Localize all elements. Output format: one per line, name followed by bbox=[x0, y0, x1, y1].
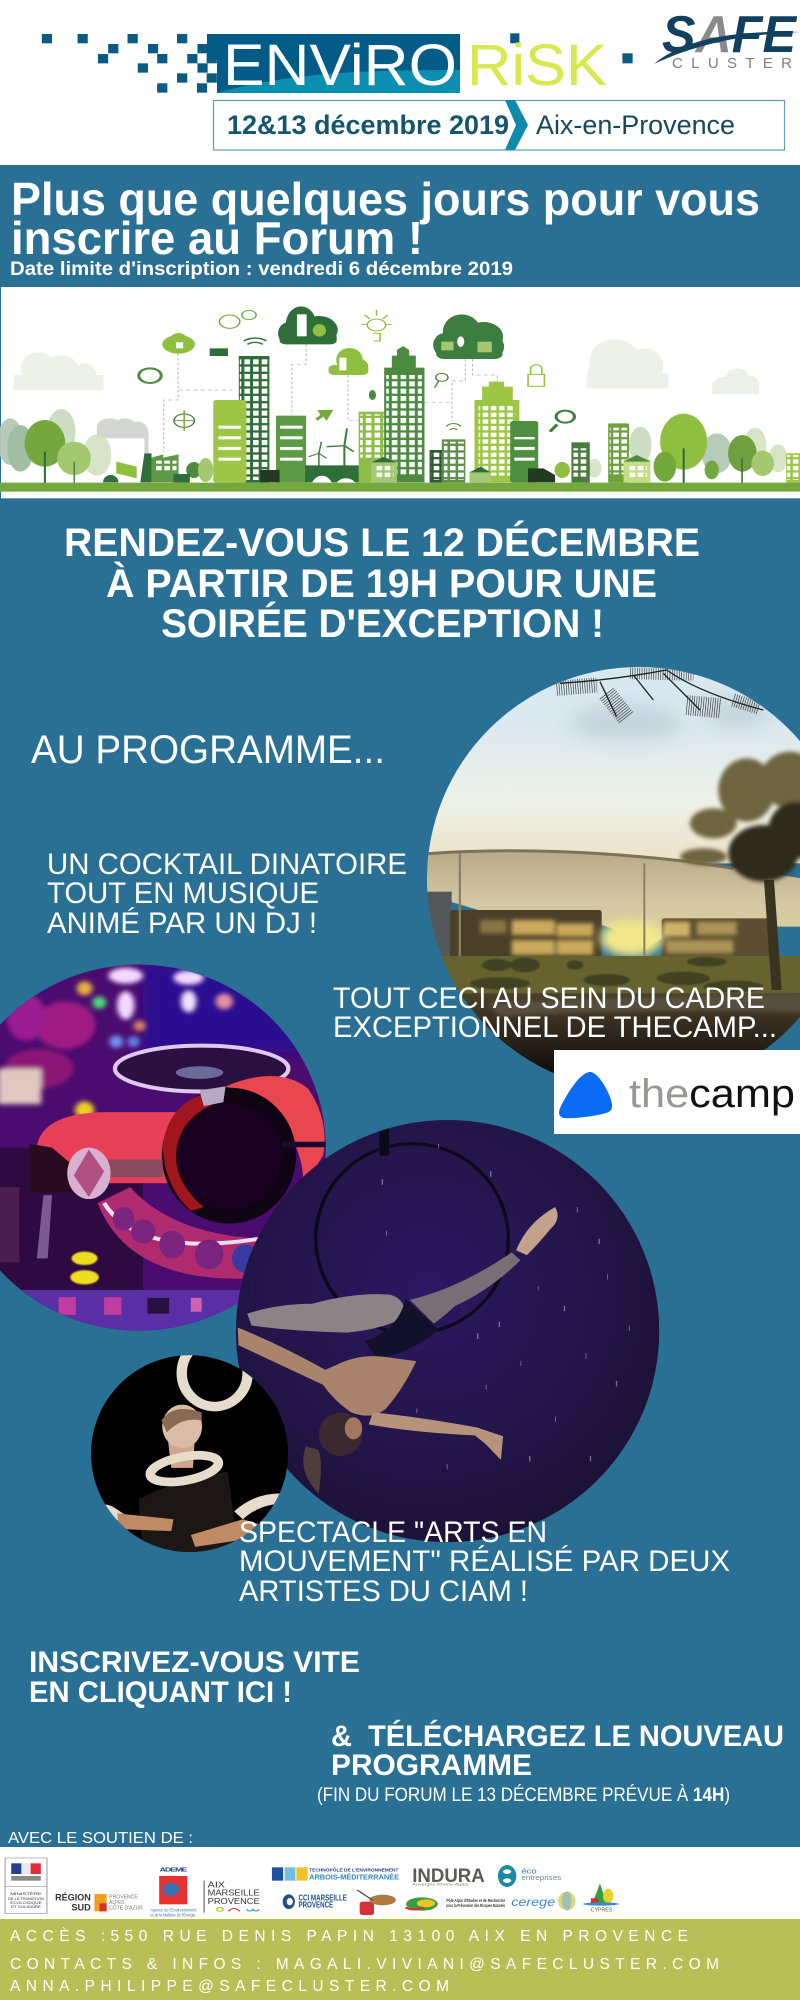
logo: ministère: ÉCOLOGIQUE bbox=[10, 1900, 42, 1906]
date banner: Aix-en-Provence bbox=[536, 110, 735, 140]
photo: juggler bbox=[91, 1355, 288, 1552]
text: cadre exceptionnel: EXCEPTIONNEL DE THECAMP... bbox=[333, 1011, 777, 1044]
buildings centre bbox=[359, 346, 424, 483]
footer contact panel bbox=[0, 1919, 800, 2000]
logo: région sud: RÉGION bbox=[55, 1891, 91, 1903]
factory smoke bbox=[97, 418, 148, 455]
sponsor logos panel bbox=[0, 1847, 800, 1919]
buildings left bbox=[213, 356, 306, 483]
thecamp logo bbox=[554, 1050, 800, 1134]
text: cocktail: UN COCKTAIL DINATOIRE bbox=[47, 848, 407, 881]
logo: aix marseille provence: AIX bbox=[208, 1880, 226, 1890]
text: cocktail: TOUT EN MUSIQUE bbox=[47, 877, 319, 910]
logo: aix marseille provence bbox=[204, 1880, 260, 1913]
logo: région sud: PROVENCE bbox=[109, 1893, 138, 1900]
text: cadre exceptionnel bbox=[333, 982, 777, 1044]
smart city illustration bbox=[0, 287, 800, 498]
date banner bbox=[214, 100, 784, 150]
EnviroRisk logo bbox=[42, 33, 633, 98]
text: cocktail: ANIMÉ PAR UN DJ ! bbox=[47, 907, 317, 940]
SAFE Cluster logo: CLUSTER bbox=[672, 55, 792, 72]
line icons bbox=[139, 310, 574, 432]
title block: inscrire au Forum ! bbox=[11, 212, 423, 264]
ENViRO wordmark: ENViRO bbox=[223, 33, 457, 98]
logo: arbois bbox=[272, 1867, 399, 1882]
title block bbox=[10, 173, 760, 280]
logo: indura: INDURA bbox=[412, 1865, 485, 1887]
logo: cci marseille provence: PROVENCE bbox=[298, 1901, 333, 1910]
cloud icons bbox=[162, 306, 504, 375]
logo: éco entreprises: entreprises bbox=[521, 1874, 561, 1882]
photo: DJ headphones bbox=[0, 964, 326, 1331]
logo: éco entreprises: éco bbox=[521, 1867, 537, 1876]
logo: arbois: TECHNOPÔLE DE L'ENVIRONNEMENT bbox=[309, 1867, 399, 1873]
logo blue box bbox=[207, 34, 460, 93]
logo: aix marseille provence: MARSEILLE bbox=[208, 1888, 260, 1898]
pixel squares bbox=[42, 33, 633, 93]
logo: ademe: Agence de l'Environnement bbox=[151, 1909, 197, 1913]
main heading: SOIRÉE D'EXCEPTION ! bbox=[161, 601, 604, 646]
logo: ademe: et de la Maîtrise de l'Énergie bbox=[151, 1913, 195, 1918]
call to action: inscription: EN CLIQUANT ICI ! bbox=[29, 1676, 292, 1709]
wind turbines bbox=[309, 428, 354, 467]
factory and solar panel bbox=[103, 453, 190, 483]
header panel bbox=[0, 0, 800, 165]
logo: région sud: CÔTE D'AZUR bbox=[109, 1904, 143, 1911]
thecamp wordmark: thecamp bbox=[629, 1072, 795, 1116]
logo: pôle alpin: Pôle Alpin d'Études et de Recherche bbox=[446, 1897, 505, 1904]
logo: indura bbox=[412, 1865, 485, 1887]
text: spectacle: MOUVEMENT" RÉALISÉ PAR DEUX bbox=[239, 1545, 730, 1578]
text: spectacle: SPECTACLE "ARTS EN bbox=[239, 1516, 547, 1549]
logo: ademe bbox=[151, 1866, 197, 1918]
title block: Plus que quelques jours pour vous bbox=[11, 173, 760, 225]
call to action: programme: PROGRAMME bbox=[331, 1749, 532, 1782]
logo: région sud: SUD bbox=[71, 1902, 91, 1913]
pale background trees bbox=[0, 409, 787, 478]
text: cadre exceptionnel: TOUT CECI AU SEIN DU CADRE bbox=[333, 982, 765, 1015]
title block: Date limite d'inscription : vendredi 6 décembre 2019 bbox=[10, 259, 513, 280]
bridge bbox=[305, 465, 372, 482]
logo: cerege bbox=[511, 1892, 576, 1910]
call to action: inscription: INSCRIVEZ-VOUS VITE bbox=[29, 1646, 360, 1679]
logo: red emblem bbox=[357, 1890, 396, 1915]
sponsors heading: AVEC LE SOUTIEN DE : bbox=[8, 1830, 193, 1847]
footer contact panel: CONTACTS & INFOS : MAGALI.VIVIANI@SAFECLUSTER.COM bbox=[10, 1956, 719, 1973]
text: spectacle: ARTISTES DU CIAM ! bbox=[239, 1575, 528, 1608]
logo teal arc bbox=[217, 70, 460, 93]
dashed network lines bbox=[164, 344, 497, 452]
logo: ministère: MINISTÈRE bbox=[10, 1891, 42, 1897]
logo: cci marseille provence: CCI MARSEILLE bbox=[298, 1894, 347, 1903]
call to action: programme bbox=[331, 1719, 784, 1782]
main heading: RENDEZ-VOUS LE 12 DÉCEMBRE bbox=[64, 520, 700, 565]
logo: ademe: ADEME bbox=[160, 1866, 187, 1873]
green trees bbox=[24, 414, 774, 483]
buildings right bbox=[430, 382, 800, 483]
background clouds bbox=[14, 339, 759, 394]
logo: cci marseille provence bbox=[283, 1894, 347, 1910]
call to action: programme: & TÉLÉCHARGEZ LE NOUVEAU bbox=[331, 1719, 784, 1753]
logo: cerege: cerege bbox=[511, 1896, 555, 1909]
footer contact panel: ANNA.PHILIPPE@SAFECLUSTER.COM bbox=[10, 1978, 449, 1995]
logo: pôle alpin bbox=[446, 1897, 505, 1909]
logo: ministère bbox=[5, 1858, 47, 1913]
logo: cyprès bbox=[583, 1883, 619, 1913]
SAFE Cluster logo: SAFE bbox=[662, 6, 797, 64]
photo: thecamp building bbox=[427, 667, 800, 1074]
sponsor logos panel: pour la Prévention des Risques Naturels bbox=[446, 1904, 505, 1909]
main heading bbox=[64, 520, 700, 646]
logo: aix marseille provence: PROVENCE bbox=[208, 1897, 260, 1906]
logo: ministère: DE LA TRANSITION bbox=[8, 1897, 44, 1902]
text: cocktail bbox=[47, 848, 407, 940]
footer contact panel: ACCÈS :550 RUE DENIS PAPIN 13100 AIX EN PROVENCE bbox=[10, 1928, 688, 1945]
logo: région sud bbox=[55, 1891, 143, 1913]
logo: arbois: ARBOIS-MÉDITERRANÉE bbox=[309, 1873, 399, 1882]
ground bbox=[0, 483, 800, 492]
logo: ministère: ET SOLIDAIRE bbox=[11, 1905, 41, 1910]
text: au programme: AU PROGRAMME... bbox=[31, 728, 385, 772]
icon: thecamp blob bbox=[559, 1072, 612, 1118]
text: spectacle bbox=[239, 1516, 730, 1608]
arrow and pins bbox=[210, 348, 376, 421]
main heading: À PARTIR DE 19H POUR UNE bbox=[106, 561, 657, 606]
date banner: 12&13 décembre 2019 bbox=[227, 110, 509, 140]
photo: aerial artist bbox=[230, 1116, 668, 1551]
call to action: inscription bbox=[29, 1646, 360, 1709]
logo: green swirl bbox=[406, 1897, 438, 1911]
logo: indura: Auvergne Rhône-Alpes bbox=[412, 1883, 469, 1887]
logo: éco entreprises bbox=[498, 1865, 561, 1887]
RiSK wordmark: RiSK bbox=[467, 33, 607, 98]
logo: cyprès: CYPRÈS bbox=[591, 1906, 613, 1913]
logo: région sud: ALPES bbox=[109, 1899, 125, 1906]
note: fin du forum: (FIN DU FORUM LE 13 DÉCEMBRE PRÉVUE À 14H) bbox=[317, 1785, 730, 1806]
